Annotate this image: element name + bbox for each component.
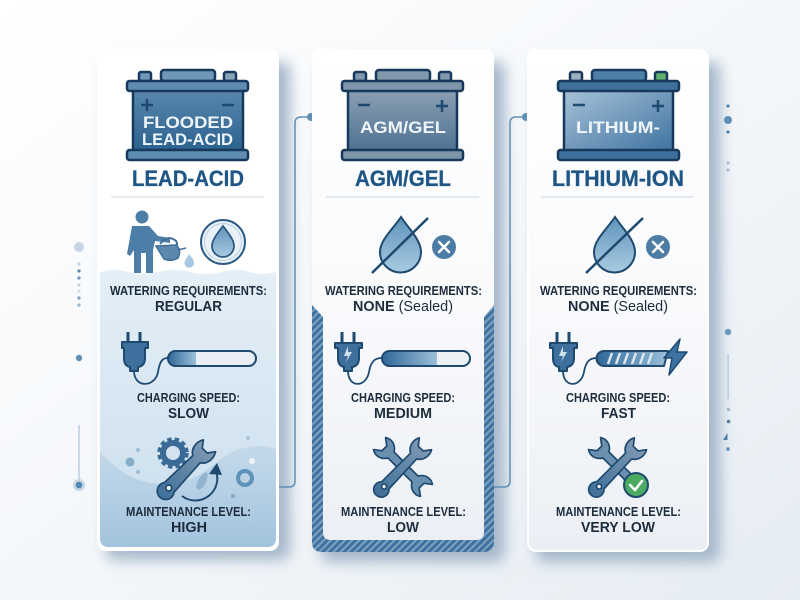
value: none sealed: NONE (Sealed) [568, 299, 668, 315]
label: maintenance: MAINTENANCE LEVEL: [126, 505, 251, 519]
lower wave [100, 446, 276, 547]
battery: flooded lead-acid: LEAD-ACID [142, 131, 233, 149]
value: high: HIGH [171, 520, 207, 536]
label: charging: CHARGING SPEED: [137, 391, 240, 405]
icon: no water [586, 217, 670, 273]
label: maintenance: MAINTENANCE LEVEL: [556, 505, 681, 519]
title: LITHIUM-ION [552, 166, 684, 191]
value: very low: VERY LOW [581, 520, 655, 536]
panel: lithium-ion [527, 49, 709, 552]
panel: lead-acid [97, 49, 279, 551]
label: maintenance: MAINTENANCE LEVEL: [341, 505, 466, 519]
label: charging: CHARGING SPEED: [566, 391, 670, 405]
card [527, 49, 709, 552]
label: charging: CHARGING SPEED: [351, 391, 455, 405]
icon: water drop circle [201, 220, 245, 264]
title: AGM/GEL [355, 166, 451, 191]
value: slow: SLOW [168, 406, 209, 422]
hatched frame [312, 305, 494, 552]
icon: no water [372, 217, 456, 273]
battery: flooded lead-acid [127, 70, 248, 160]
battery: flooded lead-acid: FLOODED [143, 114, 233, 132]
icon: crossed wrenches [369, 436, 434, 502]
icon: wrenches with check [584, 436, 649, 502]
battery: lithium: LITHIUM- [576, 119, 660, 137]
panel: AGM/GEL [312, 49, 494, 552]
card [312, 49, 494, 552]
battery: AGM/GEL: AGM/GEL [360, 119, 446, 137]
icon: plug and fast bar [550, 332, 687, 384]
battery: lithium [558, 70, 679, 160]
battery: AGM/GEL [342, 70, 463, 160]
value: fast: FAST [601, 406, 636, 422]
connector: lead-acid to AGM [279, 113, 315, 487]
panel shadows [106, 62, 720, 562]
title: LEAD-ACID [132, 166, 244, 191]
label: watering: WATERING REQUIREMENTS: [325, 284, 482, 298]
right side dots [723, 104, 732, 478]
card [97, 49, 279, 551]
value: regular: REGULAR [155, 299, 222, 315]
icon: gear and wrench [126, 436, 255, 505]
icon: person watering [127, 210, 194, 273]
value: none sealed: NONE (Sealed) [353, 299, 453, 315]
value: low: LOW [387, 520, 419, 536]
icon: plug and medium bar [335, 332, 470, 384]
label: watering: WATERING REQUIREMENTS: [110, 284, 267, 298]
connector: AGM to lithium [494, 113, 530, 487]
tinted wave background [100, 270, 276, 547]
left side dots [73, 242, 85, 491]
icon: plug and slow bar [122, 332, 256, 384]
value: medium: MEDIUM [374, 406, 432, 422]
label: watering: WATERING REQUIREMENTS: [540, 284, 697, 298]
